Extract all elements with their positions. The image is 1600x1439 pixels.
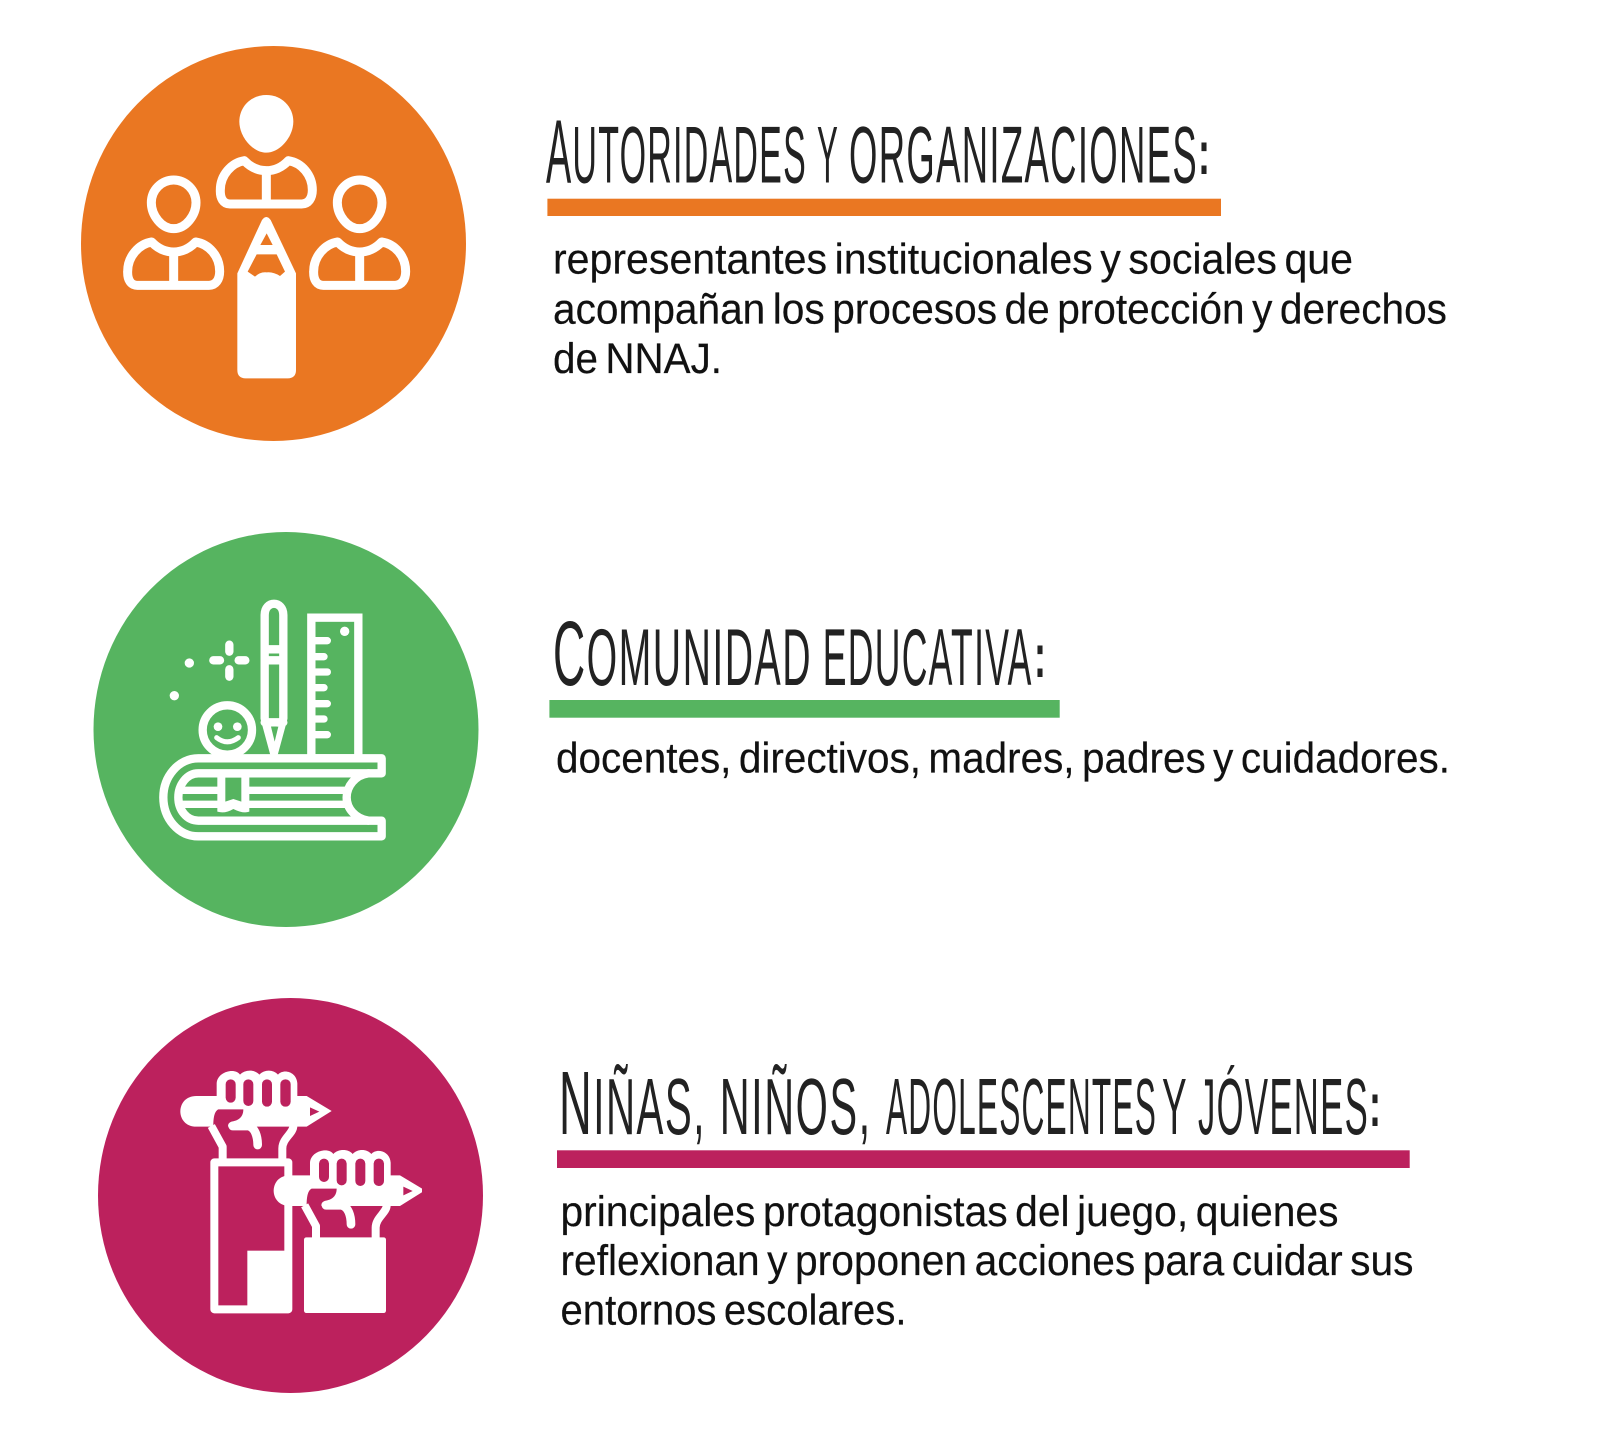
description text	[560, 1188, 1414, 1335]
orange circle	[81, 46, 466, 441]
panel: niñas, niños, adolescentes y jóvenes	[98, 998, 1414, 1393]
heading: NIÑOS,	[720, 1062, 872, 1151]
heading: AUTORIDADES	[546, 103, 807, 203]
panel: autoridades y organizaciones	[81, 46, 1447, 441]
description text: representantes institucionales y sociales que	[553, 236, 1353, 284]
heading: NIÑAS,	[559, 1054, 706, 1154]
magenta circle	[98, 998, 483, 1393]
green circle	[94, 532, 478, 927]
panel: comunidad educativa	[94, 532, 1450, 927]
right fist with pencil	[274, 1150, 429, 1239]
heading: :	[1369, 1071, 1381, 1140]
right sleeve	[304, 1237, 386, 1313]
heading: Y	[817, 111, 839, 201]
heading: :	[1198, 119, 1210, 188]
description text: de NNAJ.	[553, 335, 722, 383]
panel: comunidad educativa: EDUCATIVA	[823, 613, 1033, 703]
panel: niñas, niños, adolescentes y jóvenes: JÓVENES	[1198, 1062, 1369, 1151]
green underline	[549, 700, 1060, 718]
icon: raised fists holding pencils	[180, 1071, 429, 1313]
magenta underline	[557, 1150, 1410, 1168]
left sleeve	[214, 1162, 289, 1310]
icon: book, pencil, ruler and smiley	[163, 604, 382, 836]
description text	[553, 236, 1447, 383]
heading: Y	[1162, 1062, 1188, 1151]
description text: principales protagonistas del juego, quienes	[560, 1188, 1338, 1236]
icon: three people and a pencil	[128, 95, 406, 378]
orange underline	[547, 199, 1221, 216]
heading: ADOLESCENTES	[886, 1062, 1157, 1151]
description text: acompañan los procesos de protección y derechos	[553, 286, 1447, 334]
description text: reflexionan y proponen acciones para cuidar sus	[560, 1237, 1414, 1285]
heading: :	[1034, 622, 1046, 691]
heading: COMUNIDAD	[553, 603, 812, 705]
left fist with pencil	[180, 1071, 332, 1160]
heading	[559, 1054, 1381, 1154]
description text: docentes, directivos, madres, padres y cuidadores.	[556, 734, 1450, 782]
description text: entornos escolares.	[560, 1287, 906, 1335]
